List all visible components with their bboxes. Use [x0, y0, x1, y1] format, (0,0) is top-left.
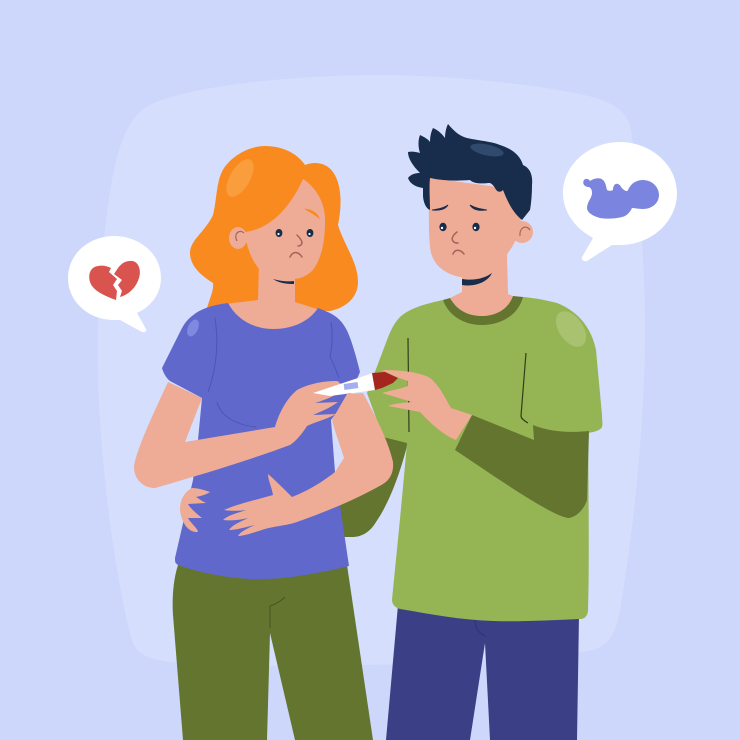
woman figure	[134, 146, 393, 740]
woman: far arm with hand on belly	[223, 393, 393, 536]
man: t-shirt	[367, 255, 602, 621]
woman: trousers	[173, 565, 373, 740]
woman: t-shirt	[162, 303, 360, 579]
man: hand holding test	[382, 370, 472, 440]
man: eyebrows	[432, 205, 487, 210]
woman: shirt fold lines	[208, 318, 339, 427]
left speech bubble: broken heart	[68, 236, 161, 332]
man: hair highlight	[469, 141, 505, 159]
woman: hand behind back	[180, 488, 210, 532]
pregnancy test	[313, 372, 398, 396]
woman: face	[245, 179, 325, 279]
woman: shirt highlight	[185, 318, 201, 338]
right speech bubble: baby	[563, 142, 677, 261]
test: red cap	[372, 372, 398, 390]
test: white body	[313, 373, 375, 396]
woman: ear	[229, 227, 247, 249]
woman: neck shadow	[273, 279, 294, 284]
woman: hair	[190, 146, 358, 311]
man: ear	[511, 221, 533, 243]
icon: broken heart	[89, 261, 140, 300]
test: result window	[344, 382, 358, 390]
man: neck shadow	[462, 273, 492, 285]
icon: baby silhouette	[583, 178, 659, 219]
woman: near arm with hand holding test	[134, 381, 343, 488]
man: shirt highlight	[550, 306, 592, 352]
man: collar	[443, 296, 523, 325]
man: face	[429, 178, 522, 278]
man: eyes	[439, 223, 480, 231]
man: nose and mouth	[452, 232, 464, 254]
man: hair	[408, 124, 532, 220]
man: back sleeve	[335, 436, 408, 537]
man: shirt fold lines	[408, 338, 528, 432]
man: forearm sleeve	[455, 415, 589, 518]
woman: neck	[225, 262, 320, 335]
background blob	[98, 75, 645, 666]
woman: nose and mouth	[290, 235, 302, 257]
man figure	[335, 124, 602, 740]
man: trousers	[386, 605, 579, 740]
woman: eyebrow	[305, 209, 319, 218]
man: neck	[450, 255, 513, 316]
woman: hair highlight	[221, 155, 259, 201]
woman: eyes	[276, 229, 313, 237]
